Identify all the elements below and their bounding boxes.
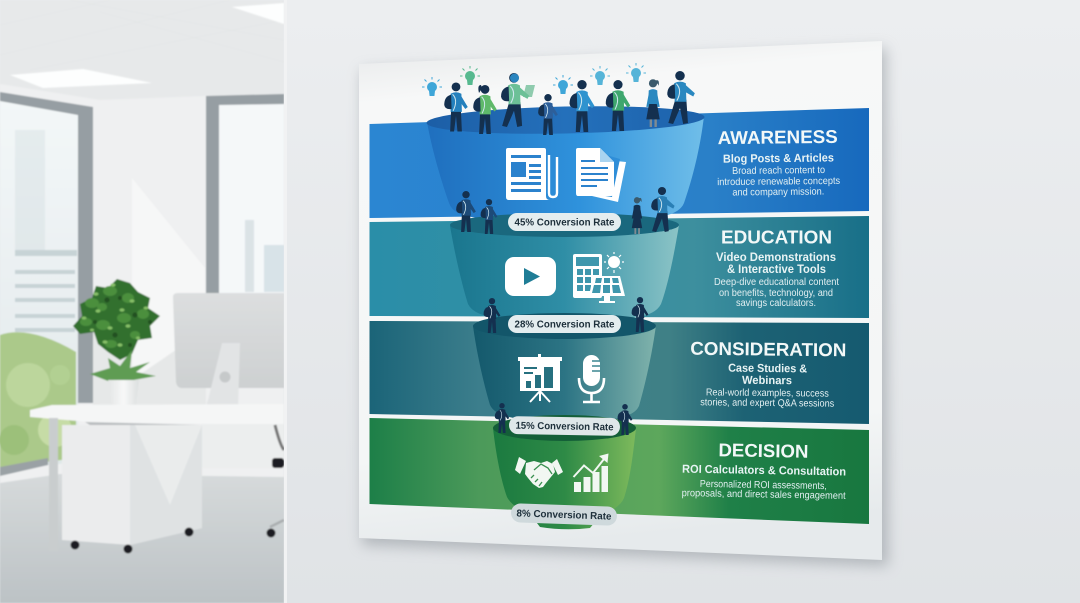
- bulb 5: [626, 63, 646, 82]
- wall shade and sun patch: [93, 300, 206, 405]
- person 6: [606, 80, 630, 131]
- bulb 4: [590, 66, 610, 85]
- rim 2: [450, 213, 679, 237]
- laptop: [523, 85, 535, 97]
- person 4: [538, 94, 558, 135]
- person 3 head: [510, 74, 519, 82]
- office scene: [0, 0, 284, 603]
- rim 1: [426, 104, 705, 136]
- icon: handshake: [515, 457, 563, 488]
- text: decision: DECISION: [718, 439, 809, 462]
- cabinet: [62, 425, 202, 545]
- ceiling light panels: [10, 3, 284, 88]
- band: education: [370, 216, 869, 318]
- rim 4: [493, 415, 636, 441]
- text: education: [714, 226, 839, 309]
- text: consideration: stories, and expert Q&A sessions: [700, 397, 834, 410]
- desk leg: [49, 418, 58, 551]
- icon: microphone: [579, 355, 604, 402]
- icon: documents: [576, 148, 626, 202]
- band: consideration: [370, 321, 869, 424]
- pill: 15% conversion: 15% Conversion Rate: [515, 421, 614, 433]
- rim person: tier 3 left: [495, 403, 509, 433]
- pill: 28% conversion: [508, 315, 621, 333]
- rim person: tier 3 right: [618, 404, 632, 435]
- person 7: [646, 79, 660, 127]
- band: decision: [370, 418, 869, 524]
- poster: [359, 41, 882, 560]
- icon: presentation board: [518, 354, 562, 402]
- people on funnel rims: [456, 187, 675, 435]
- rim person: tier 1 left a: [456, 191, 476, 232]
- person 8: [667, 71, 695, 124]
- text: consideration: Real-world examples, success: [706, 387, 829, 400]
- text: awareness: Broad reach content to: [732, 165, 826, 177]
- wheels and chair: [70, 458, 284, 554]
- poster drop shadow: [362, 48, 888, 566]
- bulb 2: [460, 66, 480, 85]
- people at top of funnel: [444, 71, 695, 135]
- monitor stand: [207, 343, 240, 411]
- left window: [0, 100, 78, 470]
- desk top: [30, 404, 284, 425]
- rim person: tier 2 right: [632, 297, 648, 332]
- poster board: [359, 41, 882, 560]
- rim person: tier 2 left: [484, 298, 500, 333]
- pill: 28% conversion: 28% Conversion Rate: [514, 320, 615, 330]
- funnel tier 3: [473, 313, 656, 419]
- funnel tier 4: [493, 415, 636, 529]
- pill: 45% conversion: [508, 213, 621, 231]
- text: awareness: [717, 126, 840, 199]
- monitor: [173, 293, 284, 388]
- text: consideration: Case Studies &: [728, 363, 807, 375]
- text: education: savings calculators.: [736, 298, 816, 309]
- band: awareness: [370, 108, 869, 218]
- plant pot: [108, 380, 139, 406]
- trees outside: [0, 332, 76, 468]
- text: education: EDUCATION: [721, 226, 832, 248]
- icon: video play button: [505, 257, 556, 296]
- pill: 15% conversion: [509, 416, 620, 436]
- plant rosette: [90, 350, 156, 381]
- pill: 8% conversion: 8% Conversion Rate: [516, 508, 612, 523]
- blurred buildings outside: [15, 130, 77, 332]
- rim person: tier 1 left b: [481, 199, 497, 234]
- text: decision: ROI Calculators & Consultation: [682, 464, 846, 478]
- bulb 3: [553, 75, 573, 94]
- person 3: [501, 73, 529, 127]
- right window: [219, 104, 284, 294]
- text: decision: Personalized ROI assessments,: [700, 479, 827, 492]
- rim 3: [473, 313, 656, 339]
- text: education: on benefits, technology, and: [719, 288, 833, 299]
- person 1: [444, 82, 468, 132]
- bulb 1: [422, 77, 442, 96]
- text: decision: [682, 439, 847, 502]
- text: awareness: introduce renewable concepts: [717, 176, 840, 188]
- text: decision: proposals, and direct sales engagement: [682, 488, 846, 502]
- pill: 45% conversion: 45% Conversion Rate: [514, 218, 615, 228]
- funnel tier 2: [450, 213, 679, 318]
- rim person: tier 1 right a: [632, 197, 642, 234]
- partition wall edge: [284, 0, 287, 603]
- floor: [0, 474, 284, 603]
- person 5: [570, 80, 594, 132]
- left window frame: [0, 92, 93, 403]
- text: awareness: AWARENESS: [718, 126, 838, 148]
- background drawers: [202, 424, 284, 468]
- ceiling: [0, 0, 284, 100]
- pill: 8% conversion: [511, 503, 617, 526]
- text: consideration: CONSIDERATION: [690, 338, 846, 360]
- bulbs above funnel: [422, 63, 646, 96]
- rim person: tier 1 right b: [651, 187, 675, 232]
- text: consideration: [690, 338, 846, 410]
- person 2: [473, 85, 497, 134]
- plant foliage: [73, 279, 160, 360]
- funnel tier 1: [426, 104, 705, 218]
- text: awareness: Blog Posts & Articles: [723, 152, 834, 166]
- icon: calculator with solar panel and sun: [573, 252, 625, 303]
- text: education: Video Demonstrations: [716, 252, 836, 264]
- icon: growth chart with arrow: [574, 454, 608, 492]
- text: awareness: and company mission.: [732, 187, 824, 198]
- person 2 ponytail: [478, 85, 482, 93]
- text: consideration: Webinars: [742, 375, 792, 387]
- text: education: & Interactive Tools: [727, 264, 826, 276]
- icon: newspaper: [506, 148, 557, 200]
- text: education: Deep-dive educational content: [714, 277, 839, 288]
